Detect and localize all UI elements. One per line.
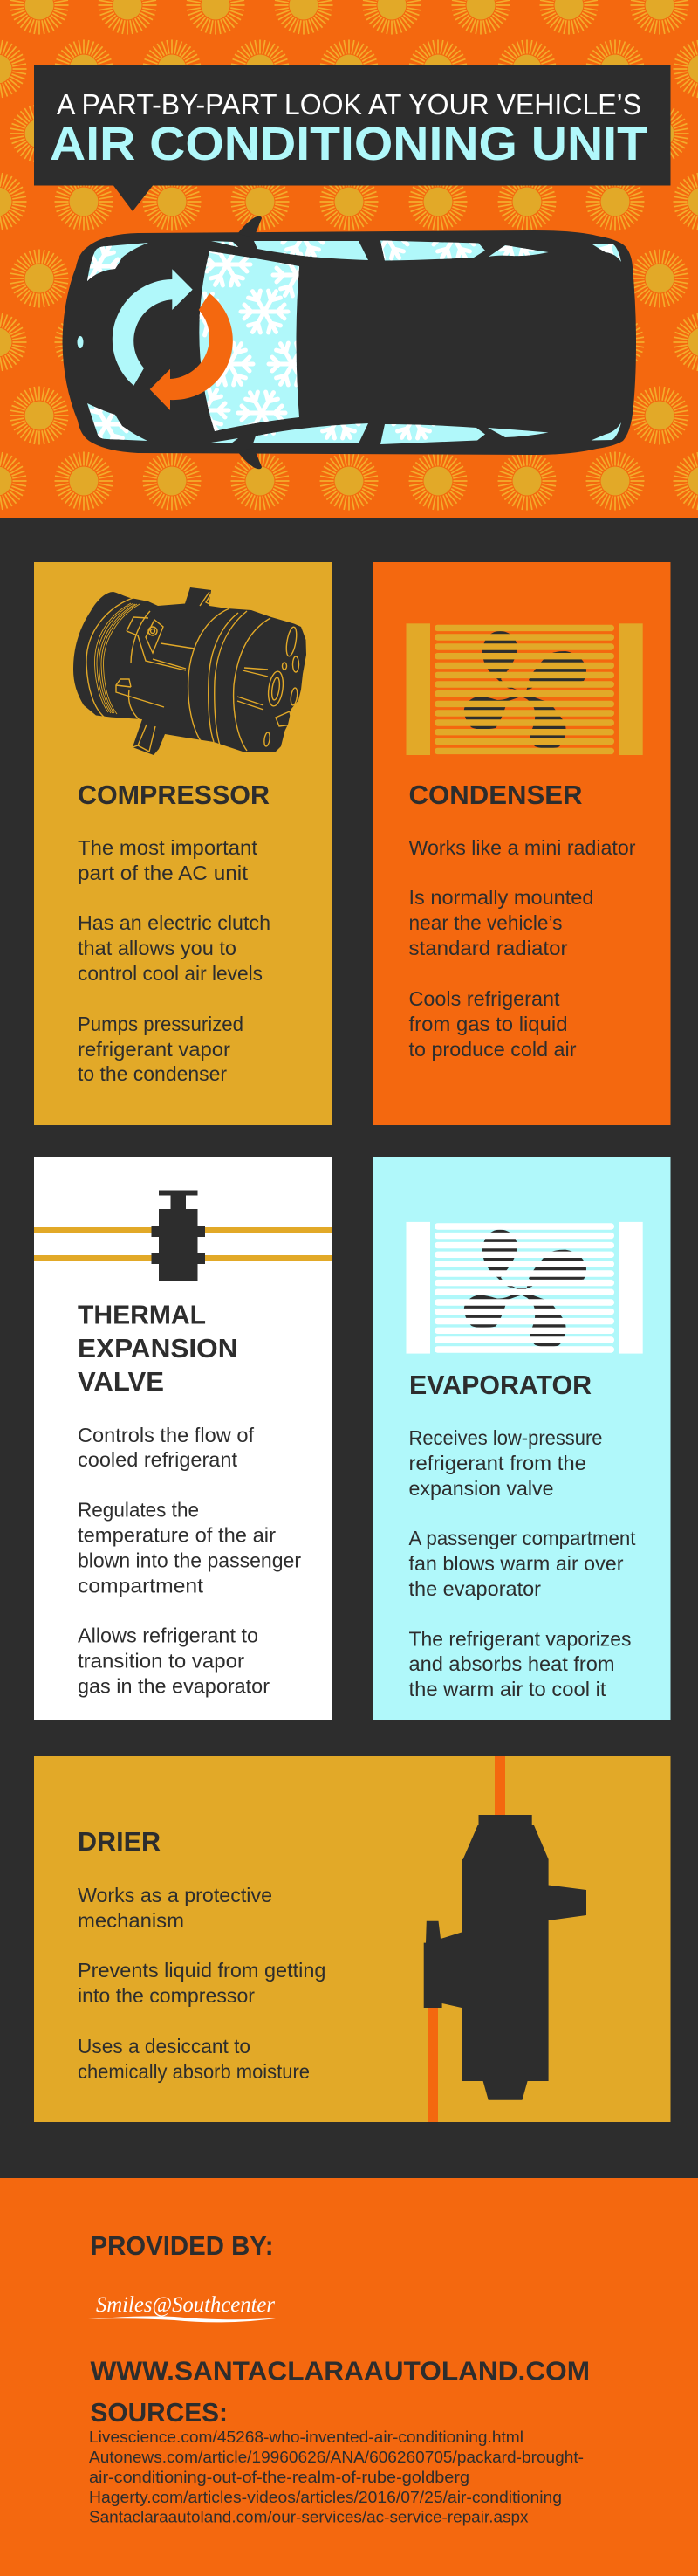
footer band [0, 2178, 698, 2576]
icon: drier with pipes [424, 1756, 586, 2122]
text: compressor facts: part of the AC unit [78, 862, 249, 884]
text: compressor facts: to the condenser [78, 1062, 227, 1085]
panel: condenser [373, 562, 670, 1125]
text: compressor facts: refrigerant vapor [78, 1038, 230, 1061]
text: drier facts: mechanism [78, 1909, 184, 1932]
text: valve facts: Allows refrigerant to [78, 1624, 258, 1646]
windows with snowflake pattern [87, 241, 621, 444]
heading: thermal expansion valve [78, 1299, 237, 1397]
text: evaporator facts: fan blows warm air over [408, 1552, 624, 1575]
panel: evaporator [373, 1157, 670, 1720]
text: valve facts: temperature of the air [78, 1524, 276, 1547]
text: evaporator facts [408, 1426, 636, 1700]
heading: compressor: COMPRESSOR [78, 780, 270, 810]
text: evaporator facts: The refrigerant vaporizes [408, 1627, 632, 1650]
heading: thermal expansion valve: EXPANSION [78, 1333, 237, 1364]
text: valve facts [78, 1424, 301, 1697]
side mirror top [237, 216, 262, 237]
website: WWW.SANTACLARAAUTOLAND.COM [91, 2355, 590, 2387]
heading: evaporator: EVAPORATOR [409, 1370, 592, 1400]
sources list: Autonews.com/article/19960626/ANA/606260705/packard-brought- [89, 2448, 584, 2466]
text: condenser facts: Cools refrigerant [408, 987, 560, 1010]
panel: thermal expansion valve [34, 1157, 332, 1720]
text: drier facts: chemically absorb moisture [78, 2060, 310, 2083]
text: drier facts [78, 1884, 326, 2083]
heading: condenser: CONDENSER [408, 780, 583, 810]
title line 2: AIR CONDITIONING UNIT [50, 118, 647, 170]
text: condenser facts: Works like a mini radiator [408, 836, 636, 859]
aqua circular arrow [113, 269, 193, 386]
icon: compressor [73, 587, 306, 755]
sources heading: SOURCES: [91, 2397, 228, 2428]
text: drier facts: Prevents liquid from getting [78, 1959, 326, 1982]
text: compressor facts: The most important [78, 836, 258, 859]
car body [63, 230, 636, 455]
icon: evaporator radiator and fan [407, 1222, 643, 1354]
text: valve facts: transition to vapor [78, 1650, 244, 1673]
sources list [89, 2428, 584, 2526]
heading: drier: DRIER [78, 1826, 161, 1857]
heading: thermal expansion valve: VALVE [78, 1366, 164, 1397]
text: valve facts: gas in the evaporator [78, 1674, 270, 1697]
title speech bubble [34, 65, 670, 211]
header band with sunburst pattern [0, 0, 698, 518]
text: evaporator facts: expansion valve [408, 1477, 553, 1500]
provided by heading: PROVIDED BY: [91, 2230, 274, 2261]
side mirror bottom [237, 448, 262, 469]
text: evaporator facts: the warm air to cool it [408, 1678, 606, 1700]
text: valve facts: cooled refrigerant [78, 1448, 238, 1471]
text: evaporator facts: A passenger compartment [408, 1527, 636, 1549]
text: evaporator facts: Receives low-pressure [408, 1426, 602, 1449]
text: compressor facts: that allows you to [78, 937, 236, 959]
panel: compressor [34, 562, 332, 1125]
text: evaporator facts: the evaporator [408, 1577, 541, 1600]
text: condenser facts: near the vehicle’s [408, 911, 562, 934]
text: evaporator facts: and absorbs heat from [408, 1652, 614, 1675]
sources list: air-conditioning-out-of-the-realm-of-rube-goldberg [89, 2468, 469, 2486]
text: condenser facts: standard radiator [408, 937, 568, 959]
title line 1: A PART-BY-PART LOOK AT YOUR VEHICLE’S [57, 88, 641, 120]
text: compressor facts: Has an electric clutch [78, 911, 270, 934]
text: drier facts: into the compressor [78, 1984, 255, 2007]
text: condenser facts: from gas to liquid [408, 1013, 567, 1035]
text: compressor facts: Pumps pressurized [78, 1013, 243, 1035]
text: condenser facts [408, 836, 636, 1061]
car top view illustration [63, 212, 640, 469]
sources list: Hagerty.com/articles-videos/articles/2016/07/25/air-conditioning [89, 2488, 562, 2506]
text: valve facts: Controls the flow of [78, 1424, 255, 1446]
icon: valve and pipes [34, 1191, 332, 1281]
logo: Smiles@Southcenter: Smiles@Southcenter [96, 2293, 275, 2317]
heading: thermal expansion valve: THERMAL [78, 1299, 206, 1330]
text: compressor facts: control cool air levels [78, 962, 263, 985]
text: valve facts: compartment [78, 1575, 204, 1597]
orange circular arrow [150, 293, 233, 410]
text: drier facts: Works as a protective [78, 1884, 272, 1906]
text: valve facts: Regulates the [78, 1498, 199, 1521]
text: evaporator facts: refrigerant from the [408, 1452, 586, 1474]
text: compressor facts [78, 836, 270, 1085]
text: condenser facts: Is normally mounted [408, 886, 593, 909]
headlight marker [77, 336, 84, 348]
sources list: Livescience.com/45268-who-invented-air-conditioning.html [89, 2428, 524, 2446]
text: drier facts: Uses a desiccant to [78, 2035, 250, 2057]
text: condenser facts: to produce cold air [408, 1038, 577, 1061]
sources list: Santaclaraautoland.com/our-services/ac-service-repair.aspx [89, 2507, 529, 2526]
text: valve facts: blown into the passenger [78, 1549, 301, 1571]
icon: condenser radiator and fan [407, 623, 643, 755]
panel: drier [34, 1756, 670, 2122]
